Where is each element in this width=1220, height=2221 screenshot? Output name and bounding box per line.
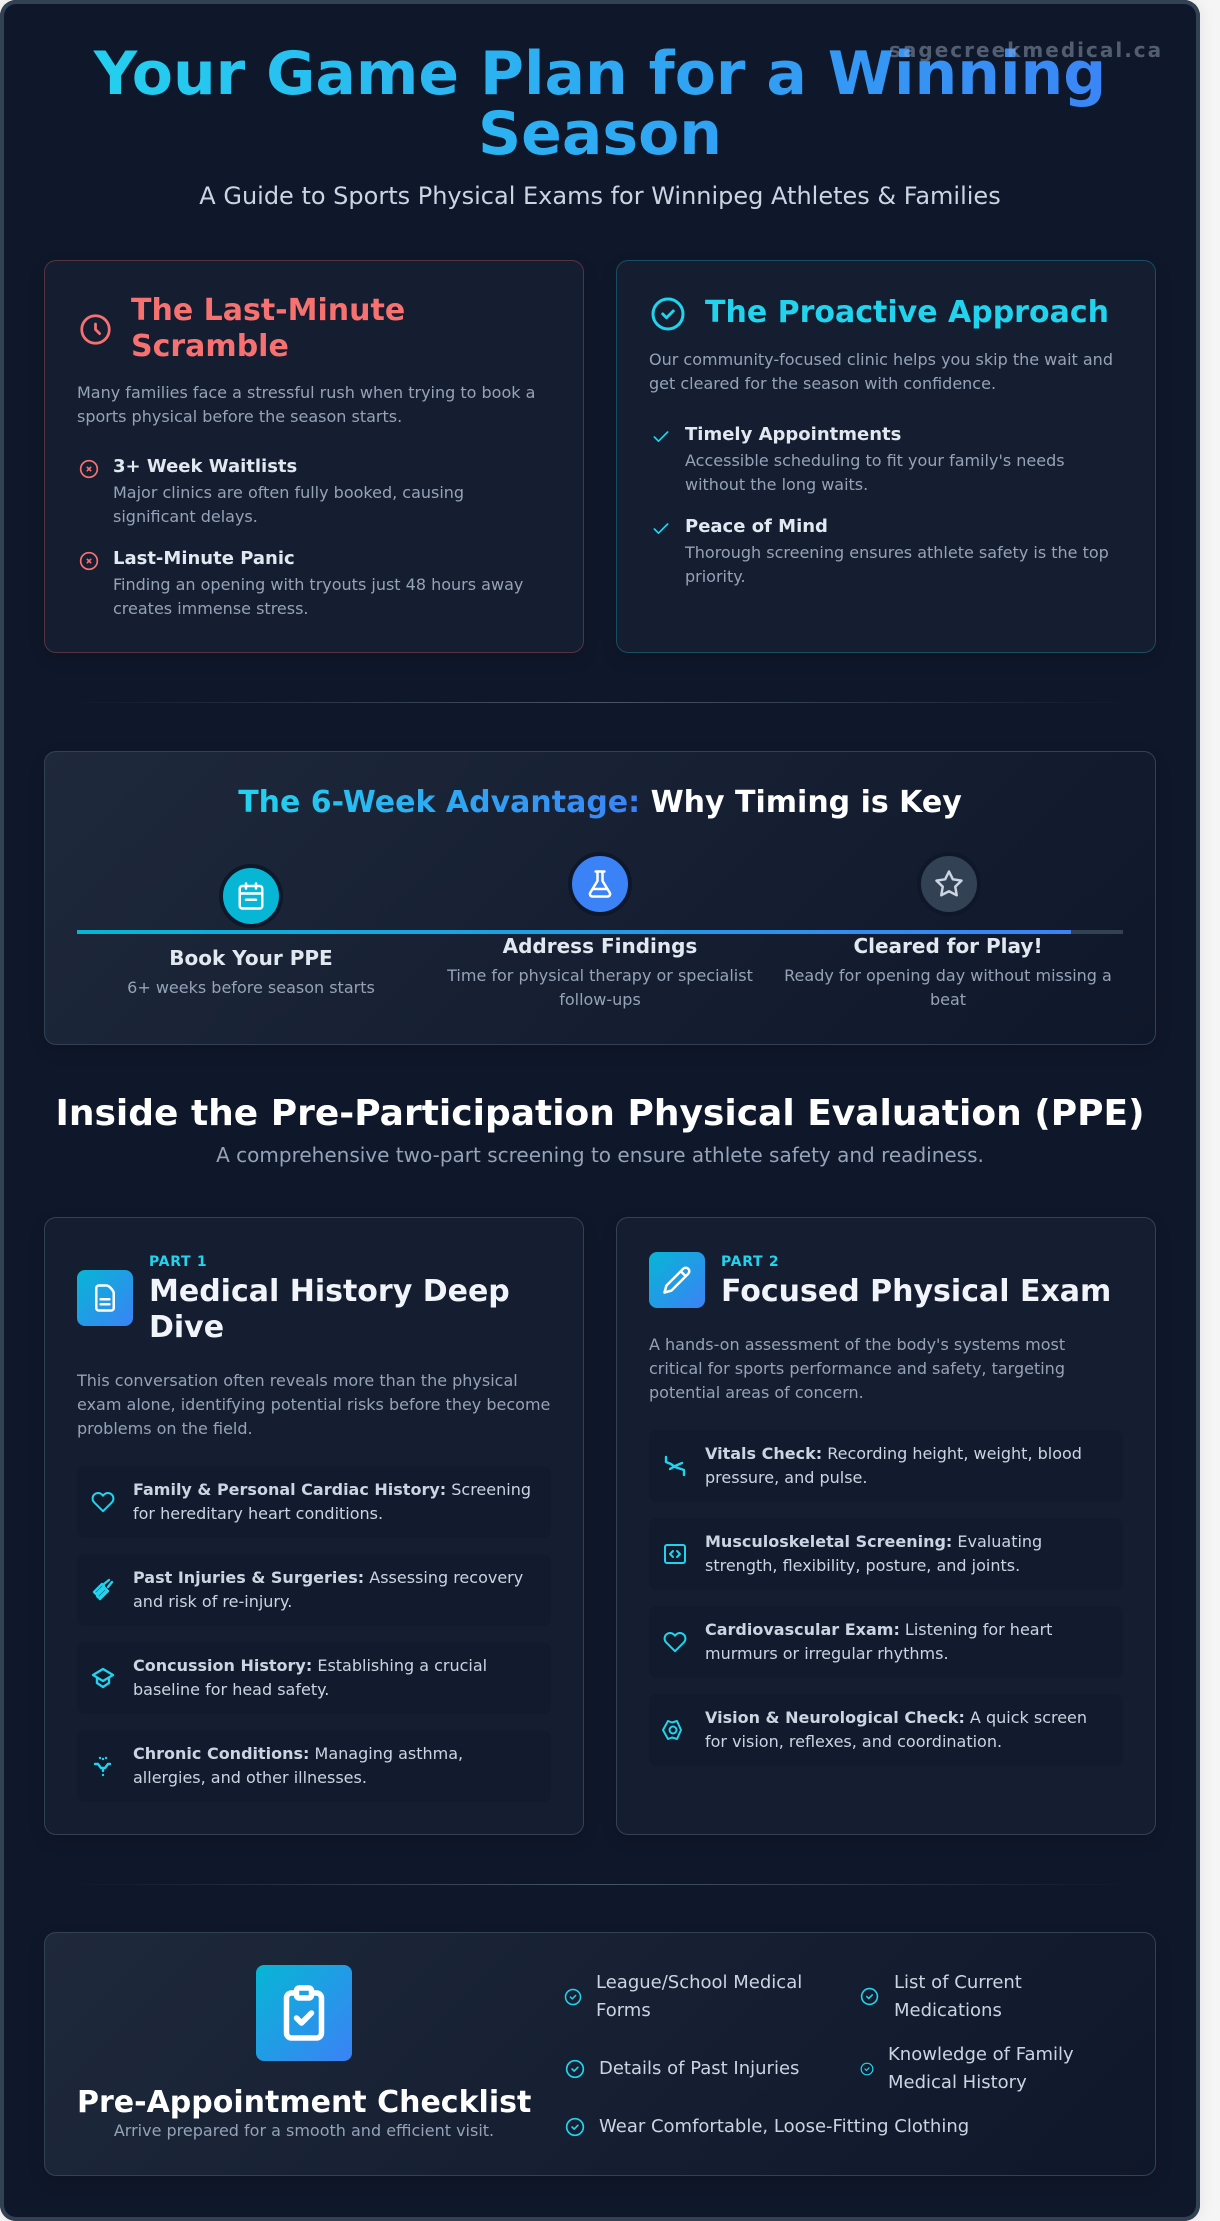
step marker: flask	[568, 852, 632, 916]
item: cardiovascular exam	[649, 1606, 1123, 1678]
item: vision and neurological check	[649, 1694, 1123, 1766]
item text: murmurs or irregular rhythms.	[705, 1644, 949, 1663]
section heading: Inside the Pre-Participation Physical Evaluation (PPE)	[55, 1093, 1145, 1134]
checklist item: Medications	[894, 2000, 1002, 2021]
step 2 text: follow-ups	[559, 990, 641, 1009]
text: intro: sports physical before the season starts.	[77, 407, 402, 426]
item: vitals check	[649, 1430, 1123, 1502]
item text	[705, 1708, 1087, 1751]
step 2 title: Address Findings	[503, 934, 697, 958]
item text: Musculoskeletal Screening: Evaluating	[705, 1532, 1042, 1551]
checklist item	[596, 1972, 802, 2021]
checklist item: Knowledge of Family	[888, 2044, 1074, 2065]
heading: the last-minute scramble	[131, 293, 405, 364]
icon: check circle	[565, 2117, 585, 2137]
item title: last-minute panic: Last-Minute Panic	[113, 548, 295, 569]
panel: the proactive approach	[616, 260, 1156, 653]
panel: 6-week timeline	[44, 751, 1156, 1045]
panel: part 2 physical exam	[616, 1217, 1156, 1835]
item: musculoskeletal screening	[649, 1518, 1123, 1590]
item text: for hereditary heart conditions.	[133, 1504, 383, 1523]
text: intro	[76, 1371, 550, 1438]
text: intro: exam alone, identifying potential risks before they become	[77, 1395, 550, 1414]
step marker: calendar	[219, 864, 283, 928]
checklist item: Details of Past Injuries	[599, 2058, 799, 2079]
item text	[133, 1744, 463, 1787]
icon: code box	[664, 1544, 686, 1564]
label: part 2: PART 2	[721, 1254, 779, 1270]
icon: eye hexagon	[662, 1720, 682, 1740]
checklist item	[894, 1972, 1022, 2021]
heading: the proactive approach: The Proactive Approach	[705, 295, 1109, 330]
text: intro: A hands-on assessment of the body's systems most	[649, 1335, 1065, 1354]
text: intro: Our community-focused clinic helps you skip the wait and	[649, 350, 1113, 369]
icon: pulse drops	[94, 1756, 112, 1776]
heading: medical history deep dive	[149, 1274, 510, 1345]
heading: focused physical exam: Focused Physical Exam	[721, 1274, 1111, 1309]
item text: pressure, and pulse.	[705, 1468, 867, 1487]
icon: x circle	[80, 460, 98, 478]
icon: check circle	[860, 2062, 874, 2076]
item: concussion history	[77, 1642, 551, 1714]
item text: strength, flexibility, posture, and joints.	[705, 1556, 1020, 1575]
item text: baseline for head safety.	[133, 1680, 329, 1699]
icon: clipboard	[256, 1965, 352, 2061]
item text: and risk of re-injury.	[133, 1592, 292, 1611]
checklist item: Forms	[596, 2000, 651, 2021]
item: past injuries	[77, 1554, 551, 1626]
item text: panic	[113, 575, 523, 618]
item text: Concussion History: Establishing a crucial	[133, 1656, 487, 1675]
item text: waitlists: significant delays.	[113, 507, 258, 526]
text: intro: This conversation often reveals more than the physical	[77, 1371, 518, 1390]
icon: x circle	[80, 552, 98, 570]
item text: panic: Finding an opening with tryouts just 48 hours away	[113, 575, 523, 594]
item text	[133, 1480, 531, 1523]
item text: peace of mind: Thorough screening ensures athlete safety is the top	[685, 543, 1109, 562]
title: Your Game Plan for a Winning	[94, 39, 1106, 109]
item text: Cardiovascular Exam: Listening for heart	[705, 1620, 1052, 1639]
text: checklist subtitle: Arrive prepared for a smooth and efficient visit.	[114, 2121, 494, 2140]
heading: the last-minute scramble: The Last-Minute	[131, 293, 405, 328]
item: chronic conditions	[77, 1730, 551, 1802]
text: intro	[649, 350, 1113, 393]
icon: check circle	[566, 2060, 584, 2078]
item text	[705, 1620, 1052, 1663]
heading: the 6-week advantage: The 6-Week Advantage: Why Timing is Key	[238, 785, 962, 820]
checklist item: Medical History	[888, 2072, 1027, 2093]
section subtitle: A comprehensive two-part screening to ensure athlete safety and readiness.	[216, 1143, 984, 1167]
item text: Chronic Conditions: Managing asthma,	[133, 1744, 463, 1763]
icon: pencil	[649, 1252, 705, 1308]
item text	[133, 1568, 523, 1611]
item text: peace of mind: priority.	[685, 567, 746, 586]
checklist item: Wear Comfortable, Loose-Fitting Clothing	[599, 2116, 969, 2137]
subtitle: A Guide to Sports Physical Exams for Winnipeg Athletes & Families	[199, 182, 1001, 210]
item text: appointments: Accessible scheduling to fit your family's needs	[685, 451, 1065, 470]
item title: timely appointments: Timely Appointments	[685, 424, 901, 445]
checklist item: League/School Medical	[596, 1972, 802, 1993]
item text: Vitals Check: Recording height, weight, blood	[705, 1444, 1082, 1463]
item: cardiac history	[77, 1466, 551, 1538]
item text: appointments	[685, 451, 1065, 494]
icon: check circle	[860, 1988, 878, 2006]
item text: Past Injuries & Surgeries: Assessing recovery	[133, 1568, 523, 1587]
item text	[705, 1532, 1042, 1575]
item title: peace of mind: Peace of Mind	[685, 516, 828, 537]
panel: pre-appointment checklist	[44, 1932, 1156, 2176]
heading: the last-minute scramble: Scramble	[131, 329, 289, 364]
icon: bandage	[92, 1578, 114, 1600]
title	[44, 44, 1156, 164]
icon: check	[654, 431, 668, 442]
icon: check circle	[564, 1988, 582, 2006]
watermark: sagecreekmedical.ca	[889, 38, 1163, 62]
item text: for vision, reflexes, and coordination.	[705, 1732, 1002, 1751]
timeline bar	[77, 930, 1123, 934]
step 3 title: Cleared for Play!	[853, 934, 1043, 958]
title: Season	[478, 99, 722, 169]
item text: Vision & Neurological Check: A quick screen	[705, 1708, 1087, 1727]
icon: heart	[664, 1632, 686, 1652]
item text: Family & Personal Cardiac History: Screening	[133, 1480, 531, 1499]
heading: medical history deep dive: Dive	[149, 1310, 224, 1345]
item text: appointments: without the long waits.	[685, 475, 868, 494]
heading: medical history deep dive: Medical History Deep	[149, 1274, 510, 1309]
text: intro	[649, 1335, 1065, 1402]
icon: heart	[92, 1492, 114, 1512]
text: intro: potential areas of concern.	[649, 1383, 864, 1402]
step 3 text	[784, 966, 1112, 1009]
icon: clock	[80, 314, 111, 345]
item text: peace of mind	[684, 543, 1109, 586]
text: intro: Many families face a stressful rush when trying to book a	[77, 383, 535, 402]
icon: document	[77, 1270, 133, 1326]
step 1 text: 6+ weeks before season starts	[127, 978, 375, 997]
step 2 text: Time for physical therapy or specialist	[447, 966, 753, 985]
text: intro	[77, 383, 535, 426]
item text: allergies, and other illnesses.	[133, 1768, 367, 1787]
label: part 1: PART 1	[149, 1254, 207, 1270]
item text	[705, 1444, 1082, 1487]
step 3 text: Ready for opening day without missing a	[784, 966, 1112, 985]
step 3 text: beat	[930, 990, 966, 1009]
panel: the last-minute scramble	[44, 260, 584, 653]
icon: vitals	[664, 1456, 686, 1476]
heading: pre-appointment checklist: Pre-Appointment Checklist	[77, 2085, 531, 2120]
icon: cap	[92, 1668, 114, 1688]
text: intro: get cleared for the season with confidence.	[649, 374, 996, 393]
step 1 title: Book Your PPE	[169, 946, 333, 970]
icon: check circle	[652, 298, 684, 330]
icon: check	[654, 523, 668, 534]
panel: part 1 medical history	[44, 1217, 584, 1835]
item text	[133, 1656, 487, 1699]
item text: panic: creates immense stress.	[113, 599, 309, 618]
step 2 text	[447, 966, 753, 1009]
step marker: star	[917, 852, 981, 916]
checklist item: List of Current	[894, 1972, 1022, 1993]
item title: 3+ week waitlists: 3+ Week Waitlists	[113, 456, 297, 477]
item text: waitlists	[113, 483, 464, 526]
item text: waitlists: Major clinics are often fully booked, causing	[113, 483, 464, 502]
checklist item	[888, 2041, 1074, 2097]
text: intro: critical for sports performance and safety, targeting	[649, 1359, 1065, 1378]
text: intro: problems on the field.	[77, 1419, 253, 1438]
